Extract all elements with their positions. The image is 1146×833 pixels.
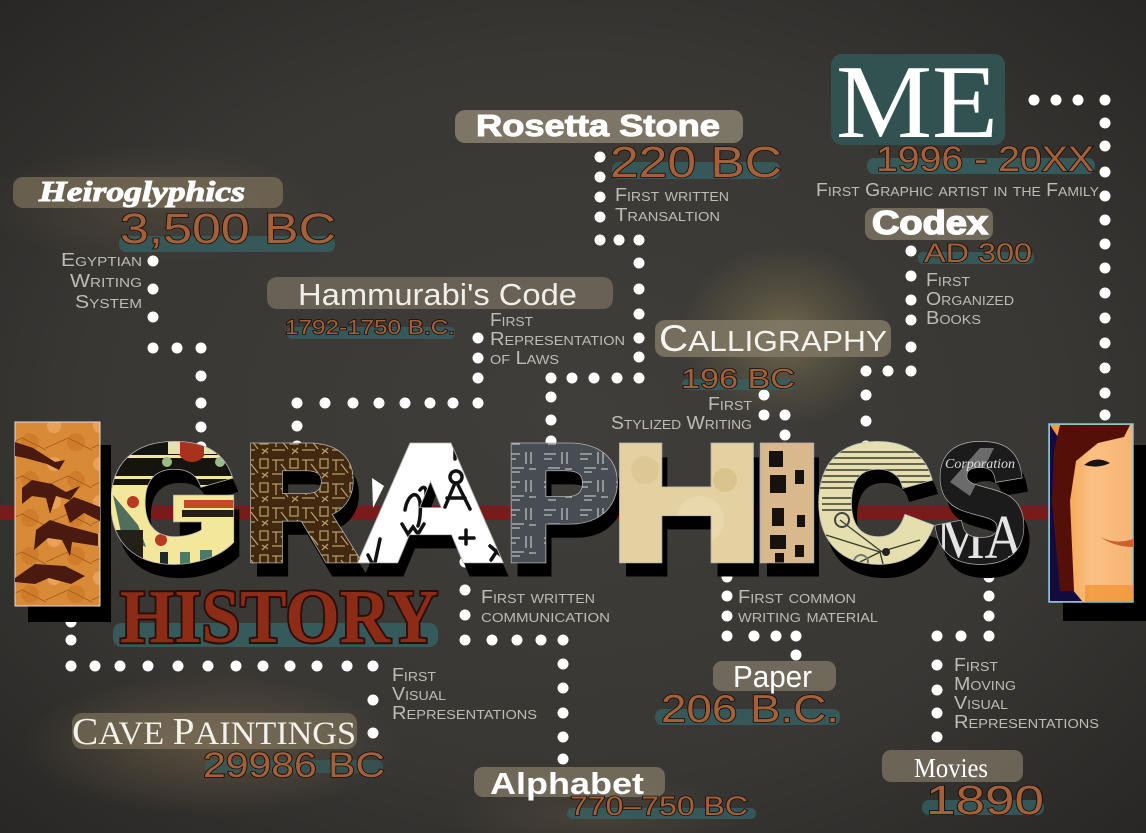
letter outlines: C [817, 413, 932, 592]
panel: Rosetta Stone: Transaltion [615, 205, 720, 225]
letter H: H [612, 413, 761, 592]
panel: Hammurabi's Code: Hammurabi's Code [298, 277, 577, 312]
panel: Movies: 1890 [926, 777, 1044, 823]
dotted connector lines [66, 94, 1110, 764]
panel: Movies: Visual [954, 693, 1008, 713]
History heading: HISTORY [120, 575, 438, 659]
letter shadows: C [823, 427, 938, 606]
panel: Cave Paintings: Representations [392, 703, 537, 723]
panel: ME: 1996 - 20XX [876, 140, 1094, 179]
panel: Hammurabi's Code: 1792-1750 B.C. [285, 317, 455, 339]
portrait tile [1049, 424, 1146, 621]
panel: Cave Paintings: First [392, 665, 436, 685]
apostrophe [372, 478, 384, 508]
panel: Paper: Paper [733, 659, 812, 694]
panel: Alphabet [474, 766, 756, 821]
panel: Hammurabi's Code: Representation [490, 329, 625, 349]
panel: Heiroglyphics [13, 176, 336, 312]
letter outlines: R [245, 413, 357, 592]
panel: Cave Paintings: CAVE PAINTINGS [72, 711, 356, 753]
letter shadows: S [942, 427, 1031, 606]
letter outlines: P [505, 413, 618, 592]
panel: Hammurabi's Code: First [490, 310, 533, 330]
panel: Paper [655, 587, 878, 731]
letter shadows: I [757, 427, 829, 606]
letter shadows: G [115, 427, 245, 606]
panel: Rosetta Stone: First written [615, 185, 729, 205]
panel: Movies: Representations [954, 712, 1099, 732]
title word: graphics [109, 413, 1031, 606]
panel: Calligraphy: Stylized Writing [611, 413, 752, 433]
letter outlines: S [936, 413, 1025, 592]
panel: Calligraphy: 196 BC [681, 363, 795, 394]
panel: first written communication caption: First written [481, 587, 595, 607]
letter outlines: H [612, 413, 761, 592]
letter I: I [751, 413, 823, 592]
panel: first written communication caption [481, 587, 610, 626]
panel: Heiroglyphics: System [75, 292, 142, 312]
panel: Movies [882, 655, 1099, 823]
panel: Calligraphy: CALLIGRAPHY [659, 318, 887, 359]
letter shadows: R [251, 427, 363, 606]
panel: Movies: Movies [914, 753, 988, 783]
panel: Paper: 206 B.C. [661, 688, 839, 731]
panel: Codex: Codex [872, 204, 989, 241]
panel: ME [816, 43, 1099, 200]
letter outlines: A [361, 413, 500, 592]
panel: ME: First Graphic artist in the Family [816, 180, 1099, 200]
panel: Codex: Books [926, 308, 981, 328]
letter A: A [361, 413, 500, 592]
cave painting tile (letter I) [15, 422, 111, 622]
panel: Alphabet: 770–750 BC [570, 791, 748, 821]
letter shadows: H [618, 427, 767, 606]
panel: Paper: First common [738, 587, 856, 607]
panel: Alphabet: Alphabet [490, 766, 644, 801]
panel: Codex: Organized [926, 289, 1014, 309]
letter shadows: P [511, 427, 624, 606]
panel: Movies: First [954, 655, 998, 675]
letter shadows [115, 427, 1031, 606]
letter P: P [505, 413, 618, 592]
panel: Heiroglyphics: Egyptian [61, 250, 142, 270]
panel: Codex: AD 300 [924, 238, 1032, 268]
letter shadows: A [367, 427, 506, 606]
panel: Calligraphy [611, 318, 891, 433]
panel: Codex: First [926, 270, 970, 290]
letter outlines [109, 413, 1025, 592]
panel: Heiroglyphics: 3,500 BC [120, 205, 336, 253]
letter C: C [817, 413, 932, 592]
letter outlines: G [109, 413, 239, 592]
letter R: R [245, 413, 357, 592]
panel: Cave Paintings: 29986 BC [203, 746, 385, 785]
panel: Movies: Moving [954, 674, 1016, 694]
panel: Heiroglyphics: Heiroglyphics [38, 176, 245, 208]
panel: Heiroglyphics: Writing [70, 271, 142, 291]
panel: Paper: writing material [738, 606, 878, 626]
panel: Cave Paintings: Visual [392, 684, 446, 704]
panel: Codex [865, 204, 1034, 328]
panel: Rosetta Stone: 220 BC [610, 138, 782, 187]
panel: ME: ME [836, 43, 998, 160]
panel: Calligraphy: First [708, 394, 752, 414]
panel: first written communication caption: communication [481, 606, 610, 626]
letter G: G [109, 413, 239, 592]
letter S: S [936, 413, 1025, 592]
red horizontal band [0, 506, 1060, 520]
panel: Rosetta Stone [455, 108, 782, 225]
panel: Hammurabi's Code [267, 277, 625, 368]
panel: Rosetta Stone: Rosetta Stone [476, 108, 720, 143]
panel: Hammurabi's Code: of Laws [490, 348, 559, 368]
letter outlines: I [751, 413, 823, 592]
panel: Cave Paintings [72, 665, 537, 785]
